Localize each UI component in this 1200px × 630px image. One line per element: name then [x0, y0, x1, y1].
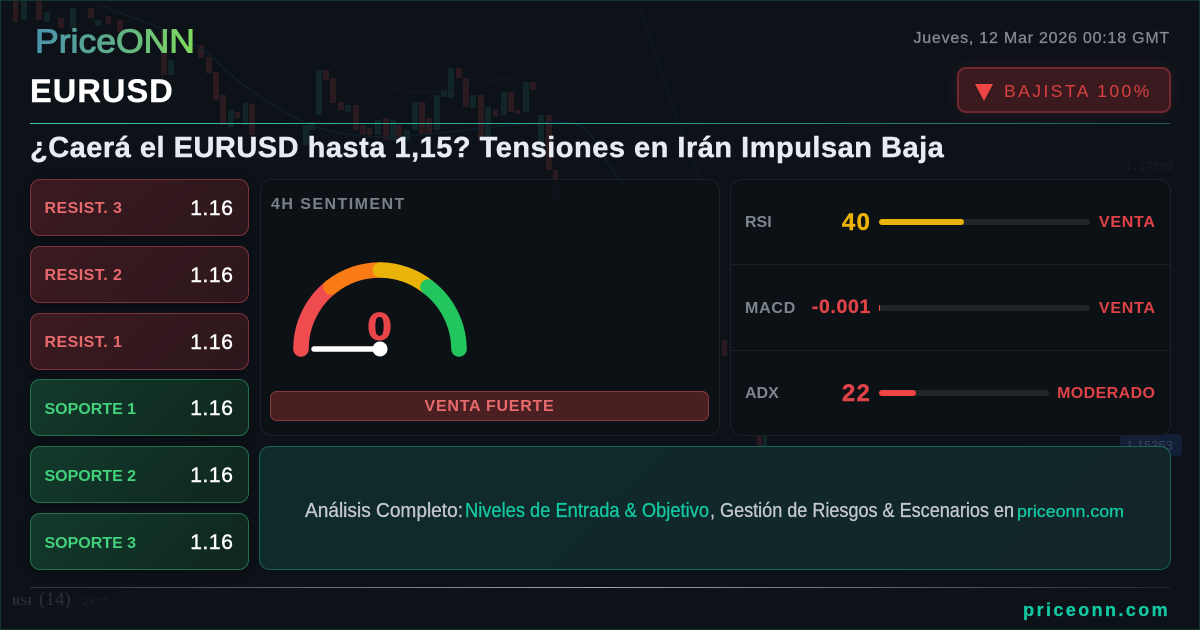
row: MACD: [731, 265, 1170, 351]
call to action text: [304, 500, 1124, 522]
MACD bar: [879, 305, 1090, 311]
icon: down triangle: [975, 84, 993, 101]
gauge needle: [314, 342, 388, 356]
call to action text: priceonn.com: [1017, 502, 1124, 521]
level: soporte 3: SOPORTE 3: [44, 535, 136, 552]
sentiment verdict: [270, 391, 709, 421]
trend badge: [957, 67, 1171, 113]
level: resist 1: 1.16: [190, 330, 234, 354]
level: soporte 2: [30, 446, 248, 503]
ADX bar: [879, 390, 1049, 396]
row: RSI: [731, 180, 1170, 265]
level: resist 1: RESIST. 1: [44, 334, 122, 351]
level: soporte 3: 1.16: [190, 530, 234, 554]
footer url: priceonn.com: [1023, 600, 1170, 620]
level: resist 1: [30, 313, 248, 370]
MACD signal: VENTA: [1099, 300, 1156, 317]
chart label: price 1.17500: 1.17500: [1125, 161, 1173, 174]
chart label: RSI 14: RSI (14) 29.77: [12, 589, 107, 610]
panel heading: 4H SENTIMENT: [271, 196, 406, 213]
chart label: current price tag: 1.15353: [1126, 438, 1173, 453]
chart label: current price tag: [1120, 434, 1182, 456]
ADX signal: MODERADO: [1057, 385, 1155, 402]
level: resist 2: [30, 246, 248, 303]
level: resist 3: RESIST. 3: [44, 200, 122, 217]
level: resist 2: RESIST. 2: [44, 267, 122, 284]
call to action text: Niveles de Entrada & Objetivo: [465, 500, 709, 522]
row: ADX: [745, 380, 1155, 407]
RSI bar: [879, 219, 1090, 225]
level: soporte 2: 1.16: [190, 464, 234, 486]
call to action text: , Gestión de Riesgos & Escenarios en: [710, 500, 1014, 522]
RSI value: 40: [842, 209, 871, 236]
level: resist 2: 1.16: [190, 264, 234, 286]
level: soporte 1: SOPORTE 1: [44, 401, 136, 418]
level: resist 3: [30, 179, 248, 236]
ticker: EURUSD: [30, 73, 174, 109]
call to action text: Análisis Completo:: [305, 500, 463, 522]
gauge chart: [293, 262, 467, 357]
date: Jueves, 12 Mar 2026 00:18 GMT: [913, 30, 1170, 47]
level: soporte 2: SOPORTE 2: [44, 468, 136, 485]
panel: indicators: [730, 179, 1171, 436]
panel: resistance and support levels: [30, 179, 249, 570]
level: soporte 1: 1.16: [190, 396, 234, 420]
MACD value: -0.001: [812, 296, 871, 318]
logo: PriceONN: [35, 22, 195, 60]
footer divider: [30, 587, 1170, 588]
RSI signal: VENTA: [1099, 214, 1156, 231]
badge text: BAJISTA 100%: [1004, 81, 1152, 101]
panel: call to action: [259, 446, 1171, 570]
ADX value: 22: [842, 380, 871, 407]
panel: 4H sentiment: [260, 179, 720, 436]
gauge value: 0: [367, 306, 392, 349]
level: resist 3: 1.16: [190, 196, 234, 220]
MACD label: MACD: [745, 300, 796, 317]
sentiment verdict: VENTA FUERTE: [425, 398, 554, 415]
RSI label: RSI: [745, 214, 772, 231]
header divider: [30, 123, 1170, 124]
level: soporte 1: [30, 379, 248, 436]
ADX label: ADX: [745, 385, 779, 402]
level: soporte 3: [30, 513, 248, 570]
headline: ¿Caerá el EURUSD hasta 1,15? Tensiones en Irán Impulsan Baja: [30, 132, 944, 164]
